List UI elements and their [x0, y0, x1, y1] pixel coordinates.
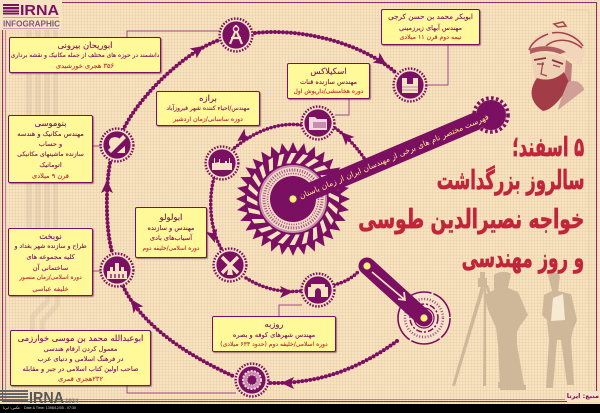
footer bar: [0, 404, 600, 413]
box: Abulolo: ابولولو: [160, 212, 182, 222]
box: Banu Musa: اتوماتیک: [39, 161, 62, 169]
portrait: [529, 22, 585, 111]
box: Khwarizmi: [10, 330, 151, 386]
box: Karaji: نیمه دوم قرن ۱۱ میلادی: [400, 34, 462, 41]
box: Banu Musa: [8, 115, 93, 183]
logo: IRNA infographic: IRNA: [20, 3, 59, 19]
connector lines: [93, 31, 448, 393]
footer bar: Date & Time: 1398/12/05 - 07:30: [24, 406, 76, 410]
box: Biruni: دانشمند در حوزه های مختلف از جمله مکانیک و نقشه برداری: [11, 52, 159, 58]
title line 4: و روز مهندسی: [462, 244, 584, 274]
box: Khwarizmi: ابوعبدالله محمد بن موسی خوارزمی: [18, 332, 143, 342]
main banner bar with title: [281, 98, 508, 211]
box: Banu Musa: قرن ۹ میلادی: [32, 172, 69, 180]
box: Khwarizmi: ۲۳۲هجری قمری: [58, 374, 103, 382]
watermark stripes: [26, 30, 60, 330]
icon: compass: [220, 19, 252, 51]
box: Banu Musa: بنوموسی: [34, 118, 66, 128]
title line 3: خواجه نصیرالدین طوسی: [358, 205, 584, 235]
box: Banu Musa: و حساب: [39, 140, 62, 148]
crank arm: [363, 262, 428, 322]
large gear: [224, 133, 359, 272]
icon: qanat: [394, 69, 426, 101]
title line 2: سالروز بزرگداشت: [436, 166, 584, 196]
box: Banu Musa: مهندس مکانیک و هندسه: [17, 130, 84, 138]
box: Rouzbeh: روزبه: [265, 318, 283, 328]
box: Abulolo: [135, 207, 207, 258]
box: Karaji: ابوبکر محمد بن حسن کرجی: [388, 12, 473, 20]
footer logo: [0, 390, 79, 404]
chain arrows: [101, 41, 390, 389]
box: Karaji: [381, 9, 480, 45]
title: [358, 133, 584, 274]
box: Nobakht: ساختمانی آن: [33, 264, 68, 272]
box: Perazeh: مهندس/احیاء کننده شهر فیروزآباد: [166, 105, 250, 112]
crank dial: [398, 292, 450, 344]
logo: IRNA infographic: [0, 0, 62, 30]
logo: IRNA infographic: INFOGRAPHIC: [3, 20, 60, 28]
box: Khwarizmi: معمول کردن ارقام هندسی: [44, 344, 117, 352]
icon: city: [101, 254, 133, 286]
box: Karaji: مهندس آبهای زیرزمینی: [399, 24, 462, 32]
icon: factory: [206, 147, 238, 179]
surveyors: [452, 272, 577, 390]
box: Khwarizmi: صاحب اولین کتاب اسلامی در جبر و مقابله: [23, 364, 138, 372]
icon: windmill: [214, 249, 246, 281]
box: Rouzbeh: دوره اسلامی/خلیفه دوم (حدود ۶۳۴ میلادی): [220, 341, 328, 348]
box: Biruni: ۳۵۶ هجری خورشیدی: [56, 62, 114, 70]
title line 1: ۵ اسفند؛: [512, 133, 584, 163]
box: Banu Musa: سازنده ماشینهای مکانیکی: [17, 151, 84, 158]
box: Perazeh: دوره ساسانی/زمان اردشیر: [173, 116, 243, 122]
box: Nobakht: نوبخت: [39, 231, 62, 241]
box: Rouzbeh: [212, 316, 336, 352]
box: Abulolo: آسیاب‌های بادی: [150, 234, 192, 242]
box: Rouzbeh: مهندس شهرهای کوفه و بصره: [233, 330, 315, 338]
box: Nobakht: طراح و سازنده شهر بغداد و: [14, 243, 87, 250]
icon: tools: [101, 129, 133, 161]
box: Nobakht: دوره اسلامی/زمان منصور: [19, 275, 82, 281]
footer bar: عکس: ایرنا: [3, 406, 20, 410]
box: Khwarizmi: در فرهنگ اسلامی و دنیای عرب: [38, 354, 124, 362]
box: Eskilax: مهندس سازنده قنات: [300, 78, 357, 86]
box: Nobakht: خلیفه عباسی: [32, 285, 69, 293]
inner chain: [211, 124, 364, 291]
box: Eskilax: [287, 63, 370, 99]
box: Abulolo: مهندس و سازنده: [148, 224, 194, 232]
box: Perazeh: برازه: [199, 93, 217, 103]
outer chain: [107, 32, 397, 383]
box: Perazeh: [156, 91, 260, 126]
box: Biruni: [9, 37, 161, 73]
icon: gate: [302, 274, 334, 306]
surveyor paper: [551, 294, 565, 321]
source credit: منبع: ایرنا: [567, 392, 599, 400]
box: Biruni: ابوریحان بیرونی: [58, 40, 112, 50]
box: Eskilax: اسکیلاکس: [310, 66, 347, 76]
box: Eskilax: دوره هخامنشی/داریوش اول: [294, 88, 363, 95]
icon: ornament: [236, 364, 268, 396]
main banner bar with title: فهرست مختصر نام های برخی از مهندسان ایران از زمان باستان: [298, 112, 490, 201]
box: Nobakht: کلیه مجموعه های: [26, 253, 75, 261]
box: Nobakht: [8, 228, 93, 296]
icon: building: [302, 107, 334, 139]
box: Abulolo: دوره اسلامی/خلیفه دوم: [143, 246, 200, 252]
